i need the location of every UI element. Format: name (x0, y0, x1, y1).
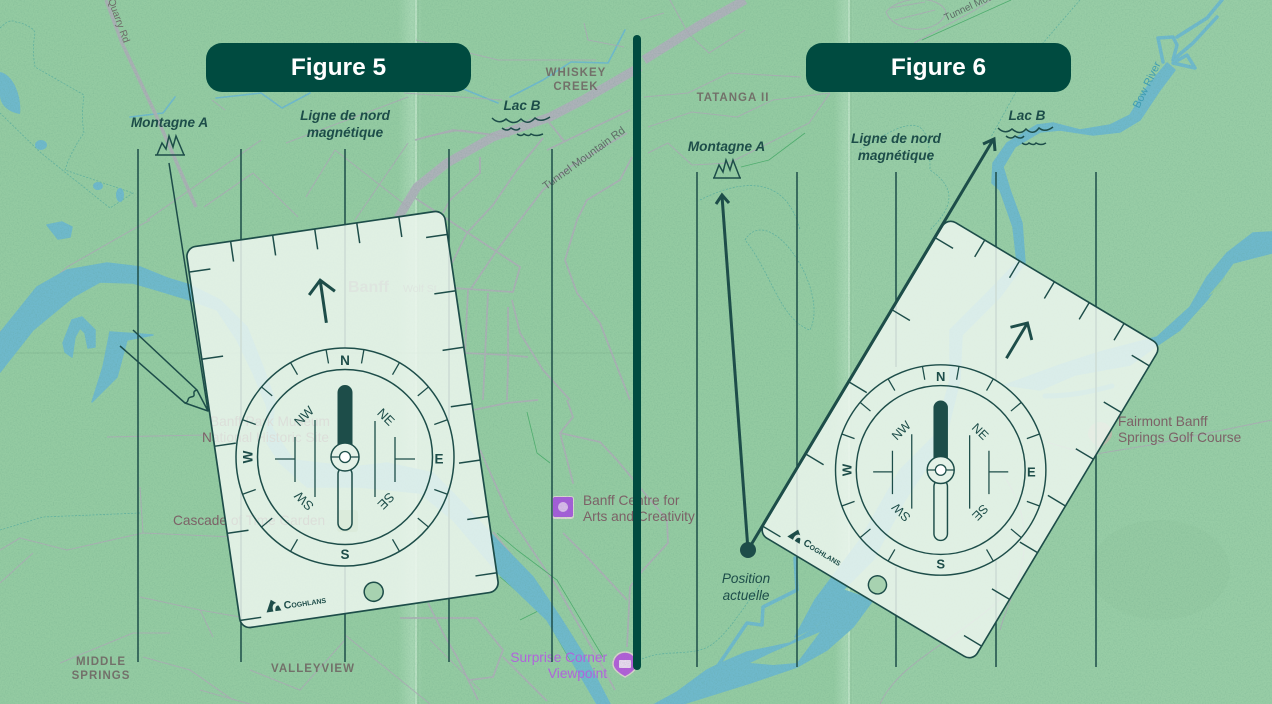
compass dial: N (936, 369, 945, 384)
bearing line from mountain A (169, 163, 208, 411)
compass baseplate (759, 218, 1161, 661)
compass dial: E (434, 452, 444, 466)
label: Montagne A: Montagne A (688, 139, 765, 154)
compass dial: E (1027, 464, 1036, 479)
map place labels: Cascade of Time Garden (173, 513, 325, 528)
map place labels: Arts and Creativity (583, 509, 695, 524)
arrow: to Montagne A (716, 195, 748, 550)
map place labels: TATANGA II (697, 92, 769, 104)
label: current position (722, 571, 770, 603)
compass dial: SE (969, 501, 991, 523)
map place labels: Banff Park Museum (210, 414, 330, 429)
map place labels: Tunnel Mountain Rd (541, 125, 628, 192)
compass dial: NW (889, 418, 914, 443)
magnetic north lines (138, 149, 552, 662)
current position dot (740, 542, 756, 558)
map place labels: Fairmont Banff (1118, 414, 1208, 429)
map place labels: Viewpoint (548, 666, 607, 681)
icon: lake waves (998, 127, 1053, 144)
label: magnetic north line (300, 108, 391, 140)
map place labels: SPRINGS (72, 670, 130, 682)
label: current position: Position (722, 571, 770, 586)
logo: Coghlans: Coghlans (283, 594, 327, 612)
compass dial: NE (374, 405, 398, 429)
map place labels: VALLEYVIEW (271, 663, 355, 675)
label: Montagne A: Montagne A (131, 115, 208, 130)
needle (927, 401, 954, 540)
logo: Coghlans (786, 527, 844, 569)
compass dial: W (839, 463, 854, 476)
logo: Coghlans (265, 592, 327, 614)
river: Bow River north (795, 63, 1175, 637)
compass dial (236, 348, 454, 566)
label: magnetic north line: Ligne de nord (851, 131, 942, 146)
compass dial: S (936, 556, 945, 571)
map place labels: MIDDLE (76, 656, 126, 668)
direction arrow (996, 317, 1038, 365)
map pins (337, 422, 1112, 677)
icon: mountain A (155, 136, 185, 155)
river: left channel (0, 263, 610, 704)
heading: figure 5 (206, 43, 471, 92)
compass dial: SW (889, 500, 913, 524)
heading: figure 6: Figure 6 (891, 54, 986, 81)
heading: figure 6 (806, 43, 1071, 92)
label: magnetic north line: magnétique (858, 148, 935, 163)
label: current position: actuelle (723, 588, 770, 603)
sighting hole (363, 581, 384, 603)
label: Lac B: Lac B (503, 98, 541, 113)
map place labels: Wolf St (403, 283, 437, 295)
map place labels: National Historic Site (202, 430, 329, 445)
needle (331, 385, 359, 530)
heading: figure 5: Figure 5 (291, 54, 386, 81)
map place labels: Surprise Corner (510, 650, 607, 665)
river: southern delta (655, 590, 873, 704)
label: magnetic north line (851, 131, 942, 163)
label: Lac B: Lac B (1008, 108, 1046, 123)
centre divider (633, 39, 641, 666)
map place labels: Banff (348, 279, 390, 296)
map place labels: Bow River (1131, 60, 1164, 110)
magnetic north lines (697, 172, 1096, 667)
map place labels: Springs Golf Course (1118, 430, 1241, 445)
compass dial (836, 365, 1046, 575)
icon: mountain A (713, 160, 741, 178)
map place labels: CREEK (553, 81, 599, 93)
compass dial: N (340, 353, 350, 368)
compass dial: SW (291, 488, 317, 514)
compass dial: NW (291, 403, 317, 429)
panel: figure 5 (120, 43, 552, 662)
icon: lake waves (492, 117, 550, 136)
direction arrow (307, 278, 339, 325)
compass dial: NE (969, 421, 991, 443)
sighting hole (865, 572, 890, 597)
icon: pencil (120, 330, 208, 411)
panel: figure 6 (688, 43, 1161, 667)
compass dial: W (240, 450, 256, 463)
map place labels: WHISKEY (546, 67, 606, 79)
label: magnetic north line: magnétique (307, 125, 384, 140)
map place labels: Banff Centre for (583, 493, 680, 508)
label: magnetic north line: Ligne de nord (300, 108, 391, 123)
arrow: to Lac B (748, 139, 995, 550)
compass baseplate (186, 210, 499, 629)
compass dial: S (340, 547, 350, 562)
compass dial: SE (374, 490, 397, 513)
river: eastern branch (1005, 232, 1272, 390)
logo: Coghlans: Coghlans (801, 538, 843, 569)
